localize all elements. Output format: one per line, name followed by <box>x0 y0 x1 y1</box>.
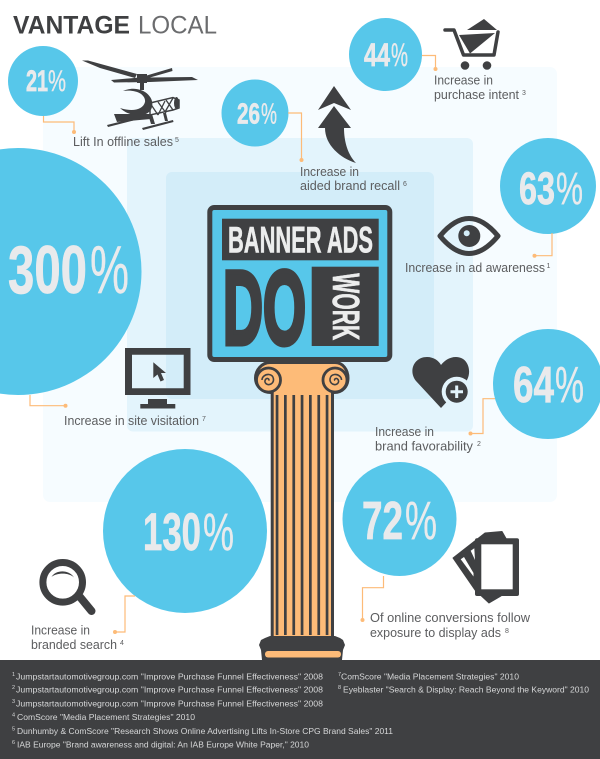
illustration: greek column <box>256 362 348 660</box>
stat: 130% increase in branded search: % <box>203 503 234 562</box>
footer: sources: Eyeblaster "Search & Display: Reach Beyond the Keyword" 2010 <box>343 684 589 694</box>
stat: 300% increase in site visitation: Increase in site visitation <box>64 414 199 428</box>
stat: 21% lift in offline sales: 5 <box>175 137 179 144</box>
footer: sources: 1 <box>12 672 15 678</box>
sign: banner ads do work: DO <box>223 250 306 367</box>
stat: 21% lift in offline sales: % <box>48 65 66 98</box>
icon: helicopter <box>82 60 198 130</box>
stat: 130% increase in branded search <box>31 449 267 652</box>
icon: computer monitor with cursor <box>125 348 190 408</box>
panel: nested background layers <box>43 67 557 502</box>
sign: banner ads do work: BANNER ADS <box>228 219 373 260</box>
stat: 72% of online conversions: 72 <box>362 491 403 551</box>
stat: 64% increase in brand favorability: brand favorability <box>375 440 474 454</box>
stat: 26% increase in aided brand recall: 26 <box>237 98 260 130</box>
sign: banner ads do work <box>210 208 390 367</box>
footer: sources <box>0 660 600 759</box>
footer: sources: 7 <box>338 672 341 678</box>
footer: sources: Jumpstartautomotivegroup.com "Improve Purchase Funnel Effectiveness" 2008 <box>16 684 323 694</box>
stat: 21% lift in offline sales: 21 <box>26 65 48 98</box>
icon: shopping cart <box>445 19 498 70</box>
stat: 44% increase in purchase intent <box>349 18 526 102</box>
icon: eye <box>440 218 498 254</box>
stat: 64% increase in brand favorability: 2 <box>477 441 481 448</box>
stat: 300% increase in site visitation <box>0 148 206 428</box>
icon: upward arrow <box>318 86 356 163</box>
stat: 26% increase in aided brand recall: % <box>261 98 277 130</box>
stat: 64% increase in brand favorability: % <box>555 356 584 413</box>
title: Vantage Local <box>13 11 217 39</box>
footer: sources: Dunhumby & ComScore "Research Shows Online Advertising Lifts In-Store CPG Brand Sales" 2011 <box>17 726 393 736</box>
footer: sources: ComScore "Media Placement Strategies" 2010 <box>17 712 195 722</box>
stat: 72% of online conversions <box>342 462 531 640</box>
stat: 72% of online conversions: exposure to display ads <box>370 626 501 640</box>
footer: sources: Jumpstartautomotivegroup.com "Improve Purchase Funnel Effectiveness" 2008 <box>16 672 323 682</box>
stat: 130% increase in branded search: branded search <box>31 638 117 652</box>
stat: 64% increase in brand favorability <box>375 329 600 454</box>
stat: 72% of online conversions: % <box>405 491 437 551</box>
stat: 63% increase in ad awareness: 63 <box>519 163 555 214</box>
stat: 26% increase in aided brand recall <box>222 80 407 193</box>
stat: 21% lift in offline sales <box>8 46 179 149</box>
icon: stack of cards <box>453 532 519 603</box>
footer: sources: 6 <box>12 740 15 746</box>
stat: 44% increase in purchase intent: Increase in <box>434 74 493 88</box>
stat: 26% increase in aided brand recall: 6 <box>403 181 407 188</box>
stat: 44% increase in purchase intent: purchase intent <box>434 88 520 102</box>
stat: 300% increase in site visitation: 300 <box>8 232 87 308</box>
stat: 44% increase in purchase intent: % <box>391 37 408 73</box>
stat: 130% increase in branded search: 4 <box>120 640 124 647</box>
stat: 72% of online conversions: Of online conversions follow <box>370 611 531 625</box>
footer: sources: 4 <box>12 712 15 718</box>
footer: sources: ComScore "Media Placement Strategies" 2010 <box>341 672 519 682</box>
stat: 44% increase in purchase intent: 3 <box>522 90 526 97</box>
stat: 63% increase in ad awareness: % <box>556 163 583 214</box>
stat: 64% increase in brand favorability: 64 <box>513 356 554 413</box>
icon: magnifying glass <box>43 562 92 611</box>
stat: 44% increase in purchase intent: 44 <box>364 37 390 73</box>
footer: sources: 8 <box>338 685 341 691</box>
stat: 130% increase in branded search: 130 <box>143 503 201 562</box>
title: Vantage Local: VANTAGE <box>13 11 130 39</box>
stat: 300% increase in site visitation: % <box>90 232 129 308</box>
stat: 63% increase in ad awareness: 1 <box>546 263 550 270</box>
stat: 26% increase in aided brand recall: Increase in <box>300 165 359 179</box>
stat: 130% increase in branded search: Increase in <box>31 624 90 638</box>
stat: 72% of online conversions: 8 <box>505 628 509 635</box>
icon: heart with plus <box>412 357 472 408</box>
stat: 63% increase in ad awareness <box>405 138 596 275</box>
title: Vantage Local: LOCAL <box>138 11 217 39</box>
stat: 64% increase in brand favorability: Increase in <box>375 425 434 439</box>
stat: 26% increase in aided brand recall: aided brand recall <box>300 179 400 193</box>
stat: 63% increase in ad awareness: Increase in ad awareness <box>405 261 545 275</box>
footer: sources: 3 <box>12 699 15 705</box>
stat: 21% lift in offline sales: Lift In offline sales <box>73 135 173 149</box>
footer: sources: Jumpstartautomotivegroup.com "Improve Purchase Funnel Effectiveness" 2008 <box>16 698 323 708</box>
footer: sources: 5 <box>12 726 15 732</box>
footer: sources: IAB Europe "Brand awareness and digital: An IAB Europe White Paper," 2010 <box>17 740 309 750</box>
footer: sources: 2 <box>12 685 15 691</box>
sign: banner ads do work: WORK <box>324 273 366 341</box>
stat: 300% increase in site visitation: 7 <box>202 416 206 423</box>
